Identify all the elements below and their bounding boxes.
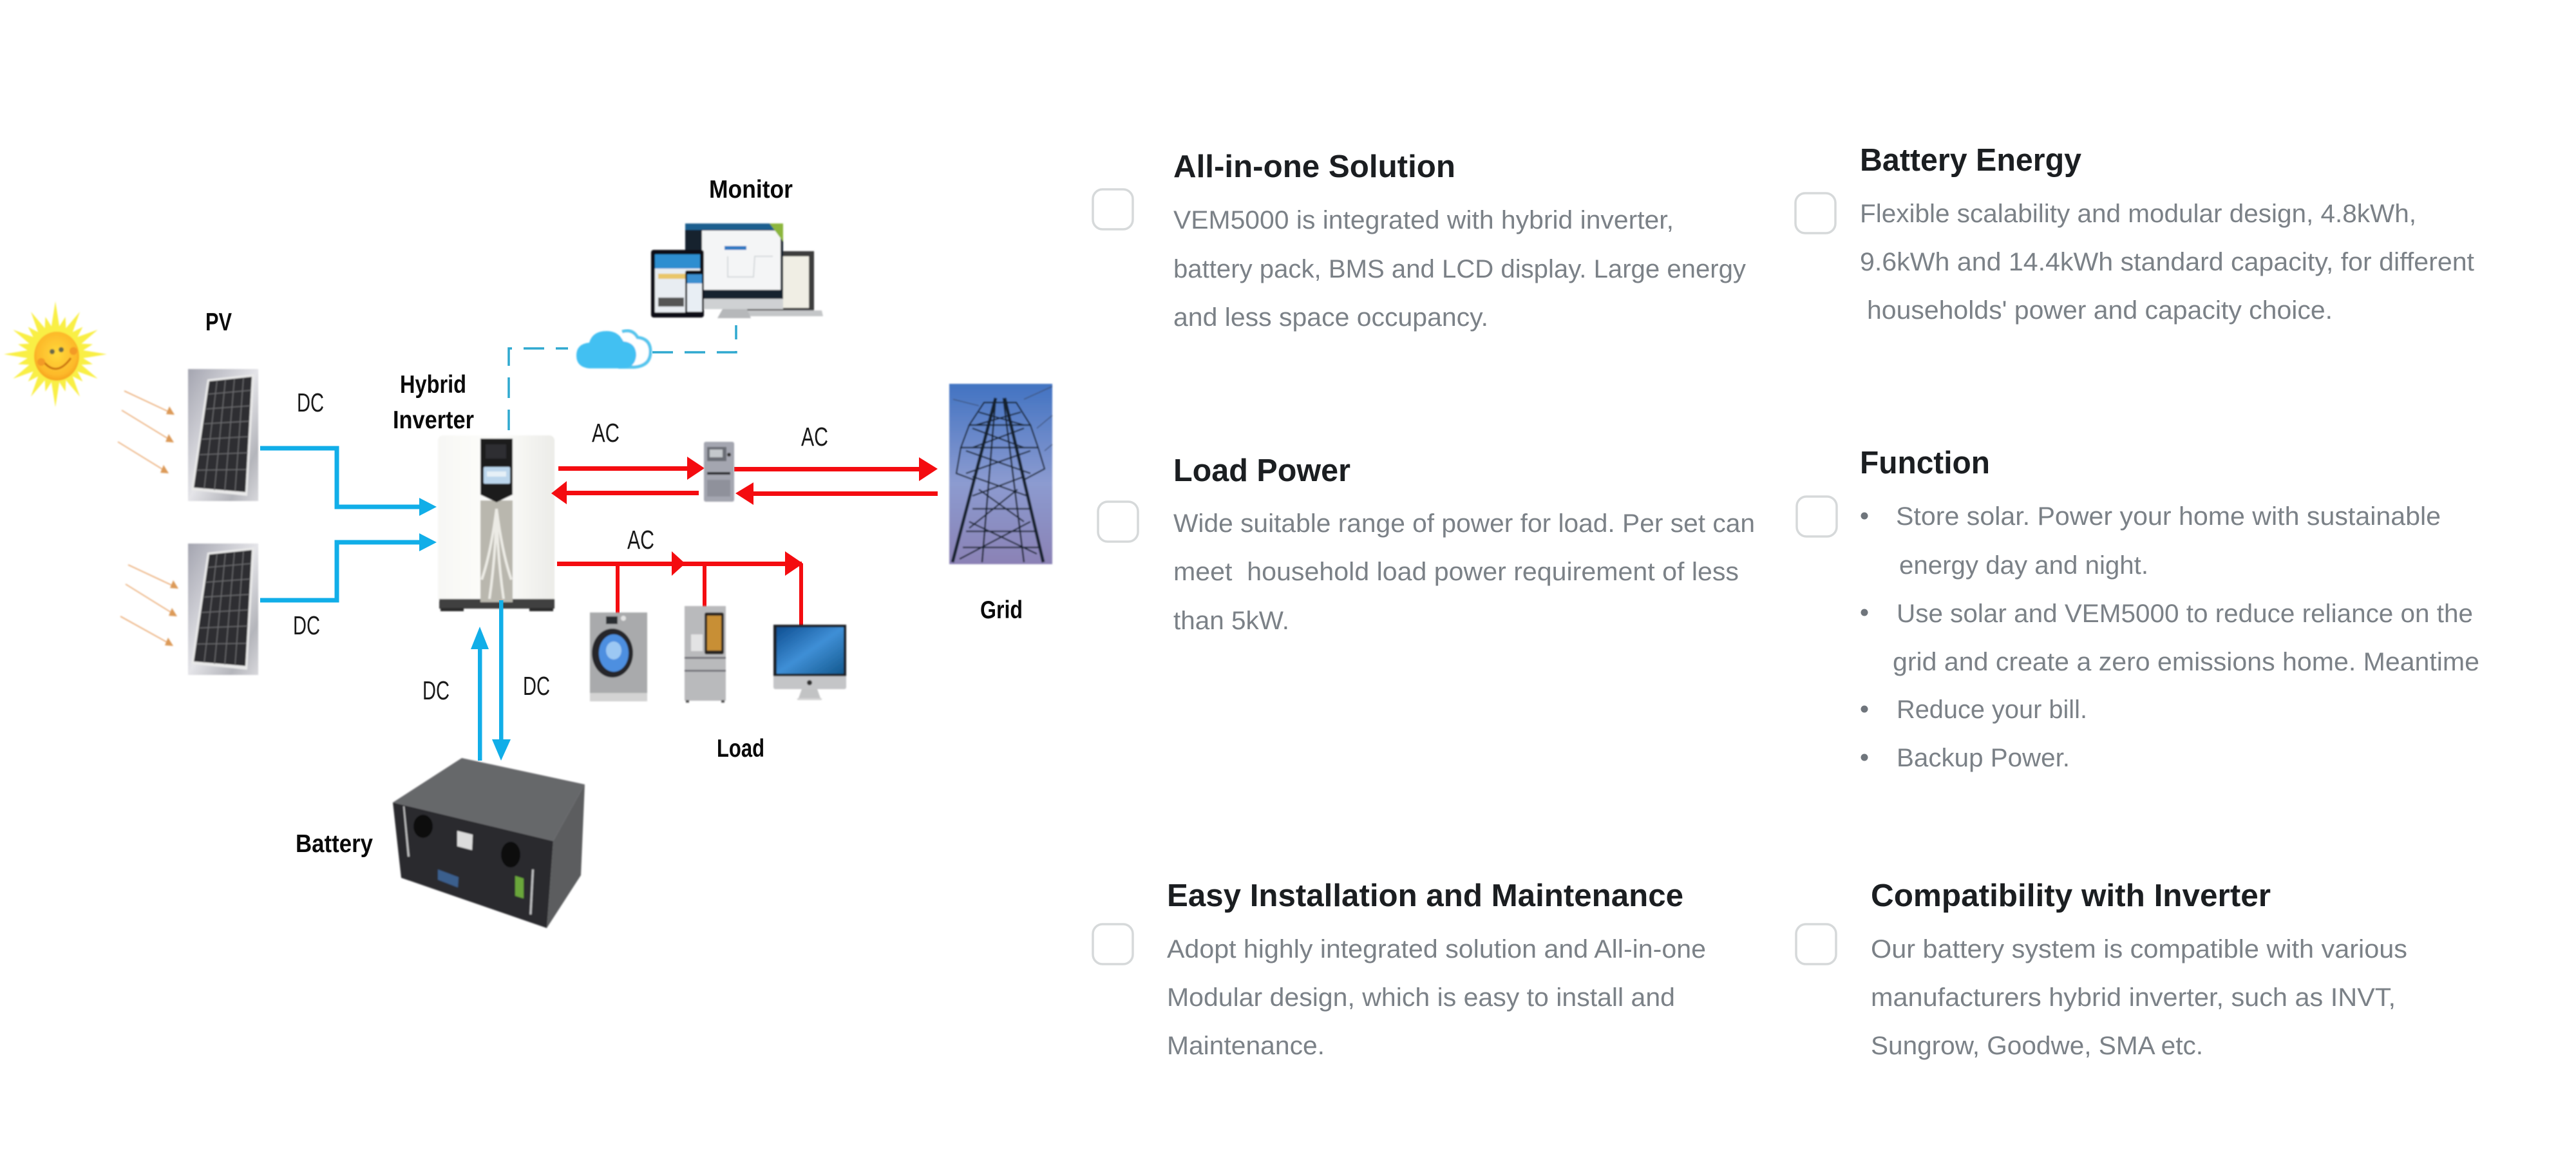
arrow: meter to inverter (551, 481, 699, 504)
panel: All-in-one Solution (1093, 149, 1746, 332)
icon: washing machine (590, 612, 647, 701)
icon: checkbox (1093, 189, 1133, 229)
icon: desktop computer (773, 625, 846, 700)
text block: households' power and capacity choice. (1867, 296, 2333, 325)
label: DC bottom: DC (293, 611, 320, 640)
icon: monitor devices (651, 223, 823, 318)
label: Load: Load (717, 735, 764, 763)
heading: Battery Energy (1860, 143, 2081, 178)
heading: All-in-one Solution (1173, 149, 1455, 184)
label: Hybrid Inverter (393, 371, 474, 434)
arrow: inverter to loads (557, 551, 803, 625)
bullet list: grid and create a zero emissions home. Meantime (1893, 648, 2479, 676)
icon: checkbox (1796, 924, 1836, 964)
text block: Maintenance. (1167, 1032, 1325, 1060)
icon: energy meter (704, 442, 734, 502)
label: Battery: Battery (296, 830, 373, 858)
system diagram (4, 176, 1052, 928)
heading: Function (1860, 446, 1990, 480)
label: Hybrid Inverter: Inverter (393, 406, 474, 434)
label: Hybrid Inverter: Hybrid (400, 371, 466, 399)
bullet list: Use solar and VEM5000 to reduce reliance on the (1897, 600, 2473, 628)
text block (1860, 200, 2474, 325)
label: Monitor: Monitor (709, 176, 793, 204)
bullet list: Store solar. Power your home with sustainable (1896, 502, 2441, 531)
label: AC load: AC (627, 525, 654, 555)
text block: Modular design, which is easy to install and (1167, 983, 1675, 1012)
label: DC battery discharge: DC (523, 671, 550, 701)
icon: refrigerator (685, 606, 726, 703)
text block: Adopt highly integrated solution and All-in-one (1167, 935, 1706, 963)
text block: Flexible scalability and modular design, 4.8kWh, (1860, 200, 2416, 228)
text block: Our battery system is compatible with various (1871, 935, 2407, 963)
arrow: battery to inverter (471, 627, 489, 761)
arrow: PV top to inverter (260, 448, 437, 516)
panel: Battery Energy (1795, 143, 2474, 325)
heading: Load Power (1173, 453, 1350, 488)
text block (1173, 206, 1746, 332)
bullet list: Backup Power. (1897, 744, 2070, 772)
label: AC meter to grid: AC (801, 422, 828, 451)
icon: cloud (576, 331, 650, 368)
icon: solar panel top (188, 369, 258, 501)
icon: hybrid inverter (438, 435, 554, 611)
panel: Easy Installation and Maintenance (1093, 878, 1706, 1060)
heading: Compatibility with Inverter (1871, 878, 2271, 913)
text block: VEM5000 is integrated with hybrid inverter, (1173, 206, 1674, 234)
arrow: PV bottom to inverter (260, 533, 437, 600)
text block (1871, 935, 2407, 1060)
text block: meet household load power requirement of less (1173, 558, 1739, 586)
panel: Load Power (1098, 453, 1755, 635)
icon: solar panel bottom (188, 544, 258, 675)
icon: checkbox (1797, 497, 1837, 536)
text block: battery pack, BMS and LCD display. Large energy (1173, 255, 1746, 283)
bullet list (1861, 502, 2479, 772)
bullet list: energy day and night. (1899, 551, 2148, 580)
arrow: inverter to battery (492, 600, 511, 761)
text block (1173, 509, 1755, 635)
icon: checkbox (1098, 502, 1138, 542)
panel: Compatibility with Inverter (1796, 878, 2407, 1060)
text block: Sungrow, Goodwe, SMA etc. (1871, 1032, 2203, 1060)
icon: grid pylon (949, 384, 1052, 564)
label: AC inverter to meter: AC (592, 418, 620, 448)
label: DC top: DC (297, 388, 324, 417)
icon: checkbox (1795, 193, 1835, 233)
text block: manufacturers hybrid inverter, such as INVT, (1871, 983, 2396, 1012)
arrow: meter to grid (734, 457, 938, 481)
connection: inverter to cloud to monitor (dashed) (509, 325, 736, 430)
icon: checkbox (1093, 924, 1133, 964)
label: Grid: Grid (980, 596, 1023, 624)
label: PV: PV (205, 308, 232, 336)
bullet list: Reduce your bill. (1897, 696, 2087, 724)
arrow: grid to meter (735, 482, 938, 505)
icon: sunlight arrows (118, 391, 178, 646)
text block: than 5kW. (1173, 607, 1289, 635)
arrow: inverter to meter (558, 457, 705, 480)
heading: Easy Installation and Maintenance (1167, 878, 1683, 913)
panel: Function (1797, 446, 2479, 772)
text block: 9.6kWh and 14.4kWh standard capacity, for different (1860, 248, 2474, 276)
label: DC battery charge: DC (422, 676, 450, 705)
icon: battery pack (393, 758, 585, 928)
icon: sun (4, 301, 107, 407)
text block: Wide suitable range of power for load. Per set can (1173, 509, 1755, 538)
text block (1167, 935, 1706, 1060)
text block: and less space occupancy. (1173, 303, 1488, 332)
panel: features (1093, 143, 2479, 1060)
